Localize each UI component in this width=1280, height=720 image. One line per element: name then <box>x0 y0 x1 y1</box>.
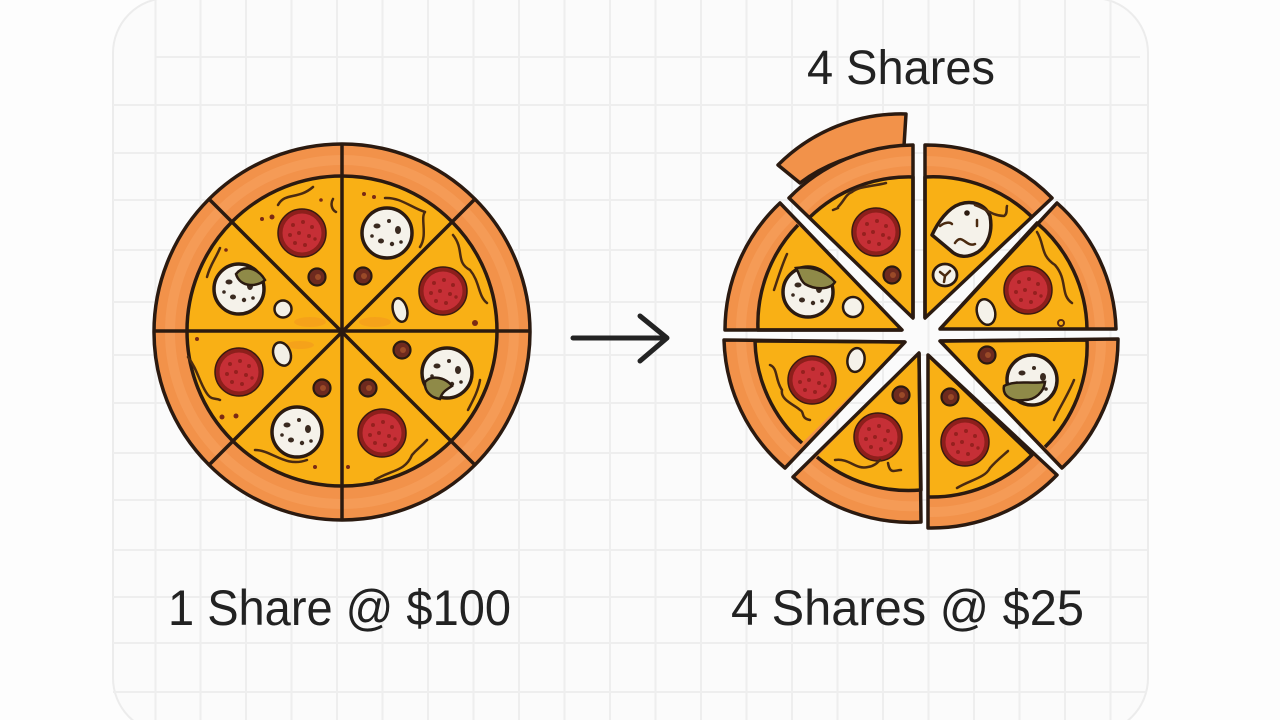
sauce specks <box>195 192 478 469</box>
slice 7 <box>724 340 905 468</box>
slice 4 <box>940 339 1118 468</box>
heading: 4 Shares: 4 Shares <box>807 42 995 95</box>
pizza: cut into slices, four shares <box>724 114 1118 528</box>
slice 6 <box>793 353 921 522</box>
slice 1 <box>789 145 913 318</box>
mushroom toppings <box>214 208 472 457</box>
small mushroom pieces <box>270 297 410 368</box>
slice 3 <box>940 203 1116 329</box>
pizza slice dividers <box>155 145 530 519</box>
caption: 4 Shares @ $25: 4 Shares @ $25 <box>731 580 1084 636</box>
pepperoni toppings <box>215 209 467 457</box>
slice 8 <box>725 203 902 330</box>
pizza: whole, one share <box>154 144 530 520</box>
cheese strands <box>188 187 487 480</box>
olive toppings <box>308 268 410 396</box>
extra crust piece <box>778 114 906 183</box>
caption: 1 Share @ $100: 1 Share @ $100 <box>168 580 511 636</box>
arrow <box>573 316 667 361</box>
slice 5 <box>928 355 1057 528</box>
slice 2 <box>925 145 1052 318</box>
